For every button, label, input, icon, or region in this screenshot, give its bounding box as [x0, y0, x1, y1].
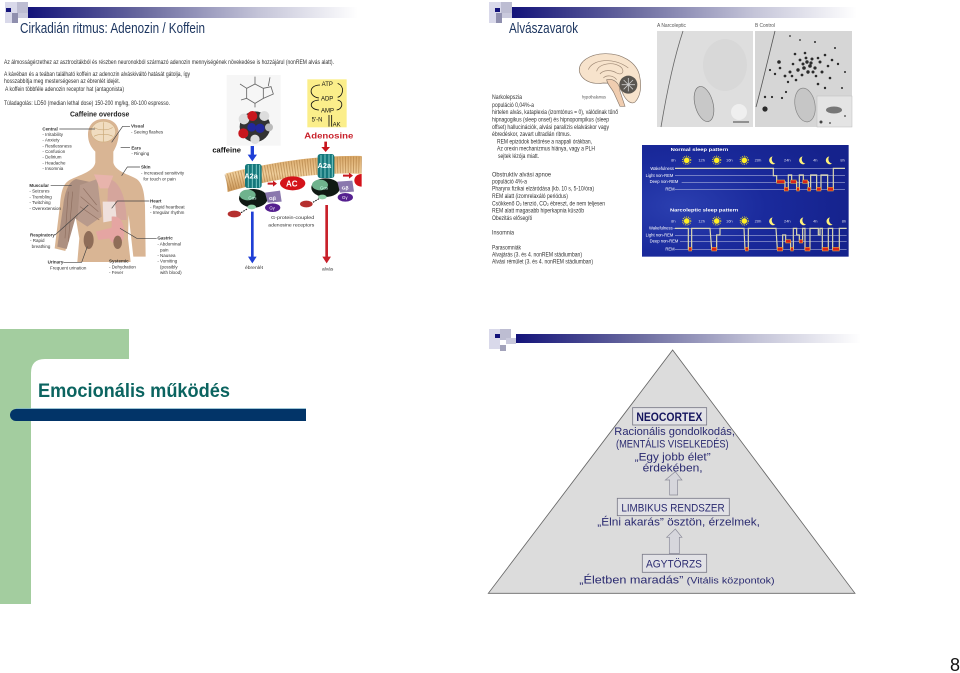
sleep disorders text: Pharynx fizikai elzáródása (kb. 10 s, 5-10/óra) [492, 186, 594, 192]
normal time axis: 12h [698, 158, 705, 163]
symptom labels: - Twitching [29, 200, 51, 205]
arrow: upper [665, 472, 682, 495]
G beta gamma left [265, 191, 282, 212]
narcoleptic red phases [689, 240, 839, 251]
brain [91, 121, 116, 142]
normal row labels: Light non-REM [646, 173, 674, 178]
ATP ADP AMP cycle box: 5'-N [312, 117, 322, 123]
chart: caffeine overdose body diagram [29, 110, 185, 275]
symptom labels: - Nausea [157, 253, 176, 258]
symptom labels: Systemic [109, 259, 129, 264]
arrow: lower [667, 529, 682, 554]
caption [268, 215, 315, 228]
A2a receptor left [244, 164, 262, 188]
symptom labels: - Trembling [29, 194, 52, 199]
inset [817, 96, 852, 127]
narcoleptic time axis: 24h [784, 218, 791, 223]
sleep disorders text: Obezitás elősegíti [492, 215, 532, 222]
symptom labels: - Insomnia [42, 166, 64, 171]
narcoleptic time axis: 12h [698, 218, 705, 223]
pointer lines [51, 126, 157, 262]
symptom labels: Skin [141, 164, 151, 169]
slide 3: Emocionális működés [0, 329, 306, 604]
brainstem description: „Életben maradás” [579, 574, 684, 587]
G beta gamma left: Gγ [269, 205, 276, 210]
symptom labels: Muscular [29, 183, 49, 188]
narcoleptic row labels: Deep non-REM [650, 239, 679, 244]
G alpha right [311, 178, 340, 197]
red arrow: adenosine to receptor [321, 142, 330, 152]
symptom labels: pain [160, 247, 169, 252]
ATP ADP AMP cycle box: ATP [322, 82, 333, 88]
diagram heading: Caffeine overdose [70, 110, 129, 119]
narcoleptic time axis: 20h [755, 218, 761, 223]
title: Cirkadián ritmus: Adenozin / Koffein [20, 21, 205, 37]
symptom labels: for touch or pain [143, 176, 176, 181]
caffeine skeletal formula [240, 77, 273, 107]
brainstem box [642, 554, 707, 572]
G beta gamma right: Gγ [342, 195, 348, 200]
intro text block: A koffein többféle adenozin receptor hat (antagonista) [5, 86, 124, 93]
sleep disorders text: Csökkenő O₂ tenzió, CO₂ ébreszt, de nem teljesen [492, 200, 605, 208]
ATP ADP AMP cycle box [307, 79, 347, 129]
sleep disorders text: populáció 4%-a [492, 178, 527, 186]
normal suns and moons [683, 156, 832, 164]
normal time axis: 8h [671, 158, 676, 163]
brainstem box: AGYTÖRZS [646, 559, 702, 571]
red arrow to second AC [343, 173, 353, 179]
brainstem description [579, 574, 775, 587]
pyramid diagram [488, 350, 855, 593]
A2a receptor right: A2a [318, 161, 332, 170]
caffeine label: caffeine [212, 147, 241, 154]
symptom labels: - Fever [109, 270, 124, 275]
narcoleptic guide lines [673, 229, 847, 249]
second AC cut off [354, 174, 362, 187]
sleep disorders text: populáció 0,04%-a [492, 102, 534, 109]
sleep disorders text: Parasomniák [492, 244, 522, 252]
symptom labels: Heart [150, 198, 162, 203]
A2a receptor right [318, 154, 334, 178]
neocortex description: érdekében, [643, 463, 703, 475]
symptom labels: - Restlessness [42, 143, 72, 148]
hypothalamus label: hypothalamus [582, 95, 606, 100]
slide 2: Alvászavarok [489, 2, 857, 266]
micrograph A: narcoleptic: A Narcoleptic [657, 23, 686, 29]
normal time axis: 4h [813, 158, 818, 163]
symptom labels: Gastric [157, 236, 173, 241]
muscular arm [57, 179, 97, 249]
micrograph B: control: B Control [755, 23, 775, 29]
symptom labels: Urinary [48, 260, 64, 265]
brain illustration [579, 54, 641, 106]
chest muscle [65, 179, 102, 242]
caption: adenosine receptors [268, 223, 315, 228]
ATP ADP AMP cycle box: AMP [321, 108, 334, 114]
symptom labels: - Increased sensitivity [141, 170, 185, 175]
symptom labels: - Headache [42, 160, 66, 165]
sleep disorders text: REM epizódok betörése a nappali órákban, [497, 138, 592, 146]
G beta gamma right [337, 181, 354, 202]
header decoration [5, 2, 358, 23]
symptom labels: - Delirium [42, 155, 62, 160]
sleep disorders text: REM alatt magasabb hiperkapnia küszöb [492, 208, 584, 214]
symptom labels: - Ringing [131, 151, 150, 156]
symptom labels: (possibly [160, 264, 178, 269]
sleep disorders text: Obstruktív alvási apnoe [492, 172, 551, 178]
symptom labels: - Seizures [29, 189, 50, 194]
slide 4: brain pyramid [488, 329, 861, 593]
narcoleptic suns and moons [683, 217, 833, 225]
sleep disorders text: Alvajárás (3. és 4. nonREM stádiumban) [492, 252, 582, 258]
normal row labels: REM [665, 187, 675, 192]
symptom labels: Frequent urination [50, 266, 87, 271]
normal time axis: 24h [784, 158, 791, 163]
symptom labels: - Vomiting [157, 259, 178, 264]
header decoration [489, 2, 857, 23]
liver area [103, 202, 117, 222]
narcoleptic time axis: 4h [813, 218, 818, 223]
symptom labels: Visual [131, 124, 144, 129]
sleep disorders text: REM alatt (izomrelaxáló periódus) [492, 193, 568, 200]
label: ébrenlét: ébrenlét [245, 265, 264, 270]
sleep disorders text [492, 94, 618, 266]
AC oval [280, 176, 305, 190]
stomach and intestine [96, 216, 124, 244]
symptom labels: - Rapid heartbeat [150, 204, 185, 209]
title: Alvászavarok [509, 21, 579, 37]
caffeine space-filling model [238, 111, 273, 144]
brainstem description: (Vitális központok) [687, 576, 775, 586]
intro text block: Túladagolás: LD50 (median lethal dose) 150-200 mg/kg, 80-100 espresso. [4, 100, 170, 107]
narcoleptic row labels: REM [665, 246, 675, 251]
micrograph A: narcoleptic [657, 23, 753, 127]
symptom labels: - Seeing flashes [131, 130, 164, 135]
symptom labels: - Confusion [42, 149, 66, 154]
normal time axis [671, 158, 845, 163]
neocortex description: Racionális gondolkodás, [614, 426, 735, 438]
chart: sleep patterns [642, 145, 849, 257]
sleep disorders text: offset) hallucinációk, alvási paralízis elalváskor vagy [492, 124, 610, 131]
G beta gamma left: Gβ [269, 196, 276, 202]
limbic box: LIMBIKUS RENDSZER [621, 502, 725, 514]
narcoleptic row labels [646, 226, 679, 251]
neuron dots [762, 35, 846, 112]
symptom labels: - Rapid [30, 238, 45, 243]
symptom labels: - Anxiety [42, 138, 60, 143]
normal guide lines [675, 169, 845, 189]
narcoleptic hypnogram trace [675, 228, 847, 249]
neocortex description: „Egy jobb élet” [635, 451, 711, 463]
sleep disorders text: Az orexin mechanizmus hiánya, vagy a PLH [497, 146, 595, 152]
symptom labels: Central [42, 126, 58, 131]
limbic box [617, 498, 729, 516]
sleep disorders text: Narkolepszia [492, 94, 522, 101]
intro text block: hosszabbítja meg mesterségesen az ébrenlét idejét. [4, 78, 120, 85]
kidneys [84, 231, 122, 249]
sleep disorders text: hipnagogikus (sleep onset) és hipnopompikus (sleep [492, 116, 609, 124]
title: Emocionális működés [38, 381, 230, 402]
normal time axis: 20h [755, 158, 761, 163]
cerebrum [579, 54, 641, 103]
symptom labels: - Dehydration [109, 264, 136, 269]
blue arrow: wake [248, 212, 257, 263]
cerebellum [619, 76, 637, 94]
membrane [226, 156, 362, 192]
micrograph B: control [755, 23, 852, 127]
G alpha right: Gαs [320, 185, 328, 190]
symptom labels: - Irritability [42, 132, 64, 137]
blue arrow: caffeine to receptor [248, 146, 257, 161]
symptom labels: - Irregular rhythm [150, 210, 185, 215]
A2a receptor left: A2a [244, 172, 259, 181]
cAMP right [300, 195, 327, 207]
neocortex box: NEOCORTEX [636, 410, 702, 424]
triangle [488, 350, 855, 593]
normal sleep heading: Normal sleep pattern [671, 147, 728, 153]
symptom labels: Respiratory [30, 232, 55, 237]
label: alvás: alvás [322, 266, 333, 271]
symptom labels: with blood) [160, 270, 182, 275]
brainstem [607, 79, 625, 106]
sleep disorders text: Alvási rémület (3. és 4. nonREM stádiumban) [492, 258, 593, 266]
sleep disorders text: Insomnia [492, 230, 514, 236]
cAMP left [228, 205, 256, 217]
normal hypnogram trace [675, 168, 845, 189]
symptom labels [29, 124, 185, 275]
red arrow to AC [268, 181, 277, 187]
neocortex description: (MENTÁLIS VISELKEDÉS) [616, 438, 729, 451]
chart: adenosine receptor diagram [212, 75, 362, 271]
symptom labels: breathing [32, 244, 51, 249]
navy rule [10, 409, 306, 421]
normal row labels: Wakefulness [650, 166, 674, 171]
narcoleptic time axis [671, 218, 846, 223]
symptom labels: Ears [131, 145, 142, 150]
body silhouette [55, 119, 146, 262]
ATP ADP AMP cycle box: ADP [321, 97, 333, 103]
normal row labels [646, 166, 679, 192]
sleep disorders text: sejtek lézója miatt. [498, 153, 539, 160]
narcoleptic time axis: 16h [726, 218, 733, 223]
molecule background [227, 75, 281, 146]
intro text block: A kávéban és a teában található koffein az adenozin alváskiváltó hatását gátolja, így [4, 71, 191, 78]
slide 1: Cirkadián ritmus [4, 2, 362, 275]
intro text block [4, 59, 334, 107]
normal time axis: 16h [726, 158, 733, 163]
narcoleptic heading: Narcoleptic sleep pattern [670, 208, 738, 214]
red arrow: sleep [322, 205, 331, 263]
AC oval: AC [286, 179, 298, 188]
normal row labels: Deep non-REM [650, 179, 679, 184]
sleep disorders text: ébredéskor, zavart ultradián ritmus. [492, 131, 571, 138]
cortical folds [588, 61, 628, 80]
heart and trachea [94, 174, 113, 188]
neocortex description [614, 426, 735, 475]
symptom labels: - Abdominal [157, 241, 181, 246]
limbic description: „Élni akarás” ösztön, érzelmek, [597, 516, 760, 529]
G beta gamma right: Gβ [342, 185, 349, 191]
intro text block: Az álmosságérzethez az asztrocitákból és részben neuronokból származó adenozin mennyiségének növekedése is hozzájárul (nonREM alvás alatt). [4, 59, 334, 66]
caption: G-protein-coupled [271, 215, 315, 220]
narcoleptic time axis: 8h [842, 218, 846, 223]
adenosine label: Adenosine [304, 132, 354, 141]
narcoleptic row labels: Wakefulness [649, 226, 673, 231]
narcoleptic time axis: 8h [671, 218, 676, 223]
normal red phases [777, 180, 833, 191]
ATP ADP AMP cycle box: AK [333, 123, 341, 129]
green corner panel [0, 329, 129, 604]
normal time axis: 8h [840, 158, 845, 163]
header decoration [489, 329, 861, 351]
narcoleptic row labels: Light non-REM [646, 232, 674, 237]
G alpha left: Gαs [248, 196, 256, 201]
symptom labels: - Overextension [29, 206, 61, 211]
G alpha left [239, 189, 268, 208]
sleep disorders text: hirtelen alvás, kataplexia (izomtónus = 0), válódinak tűnő [492, 109, 618, 116]
lungs [107, 179, 127, 220]
